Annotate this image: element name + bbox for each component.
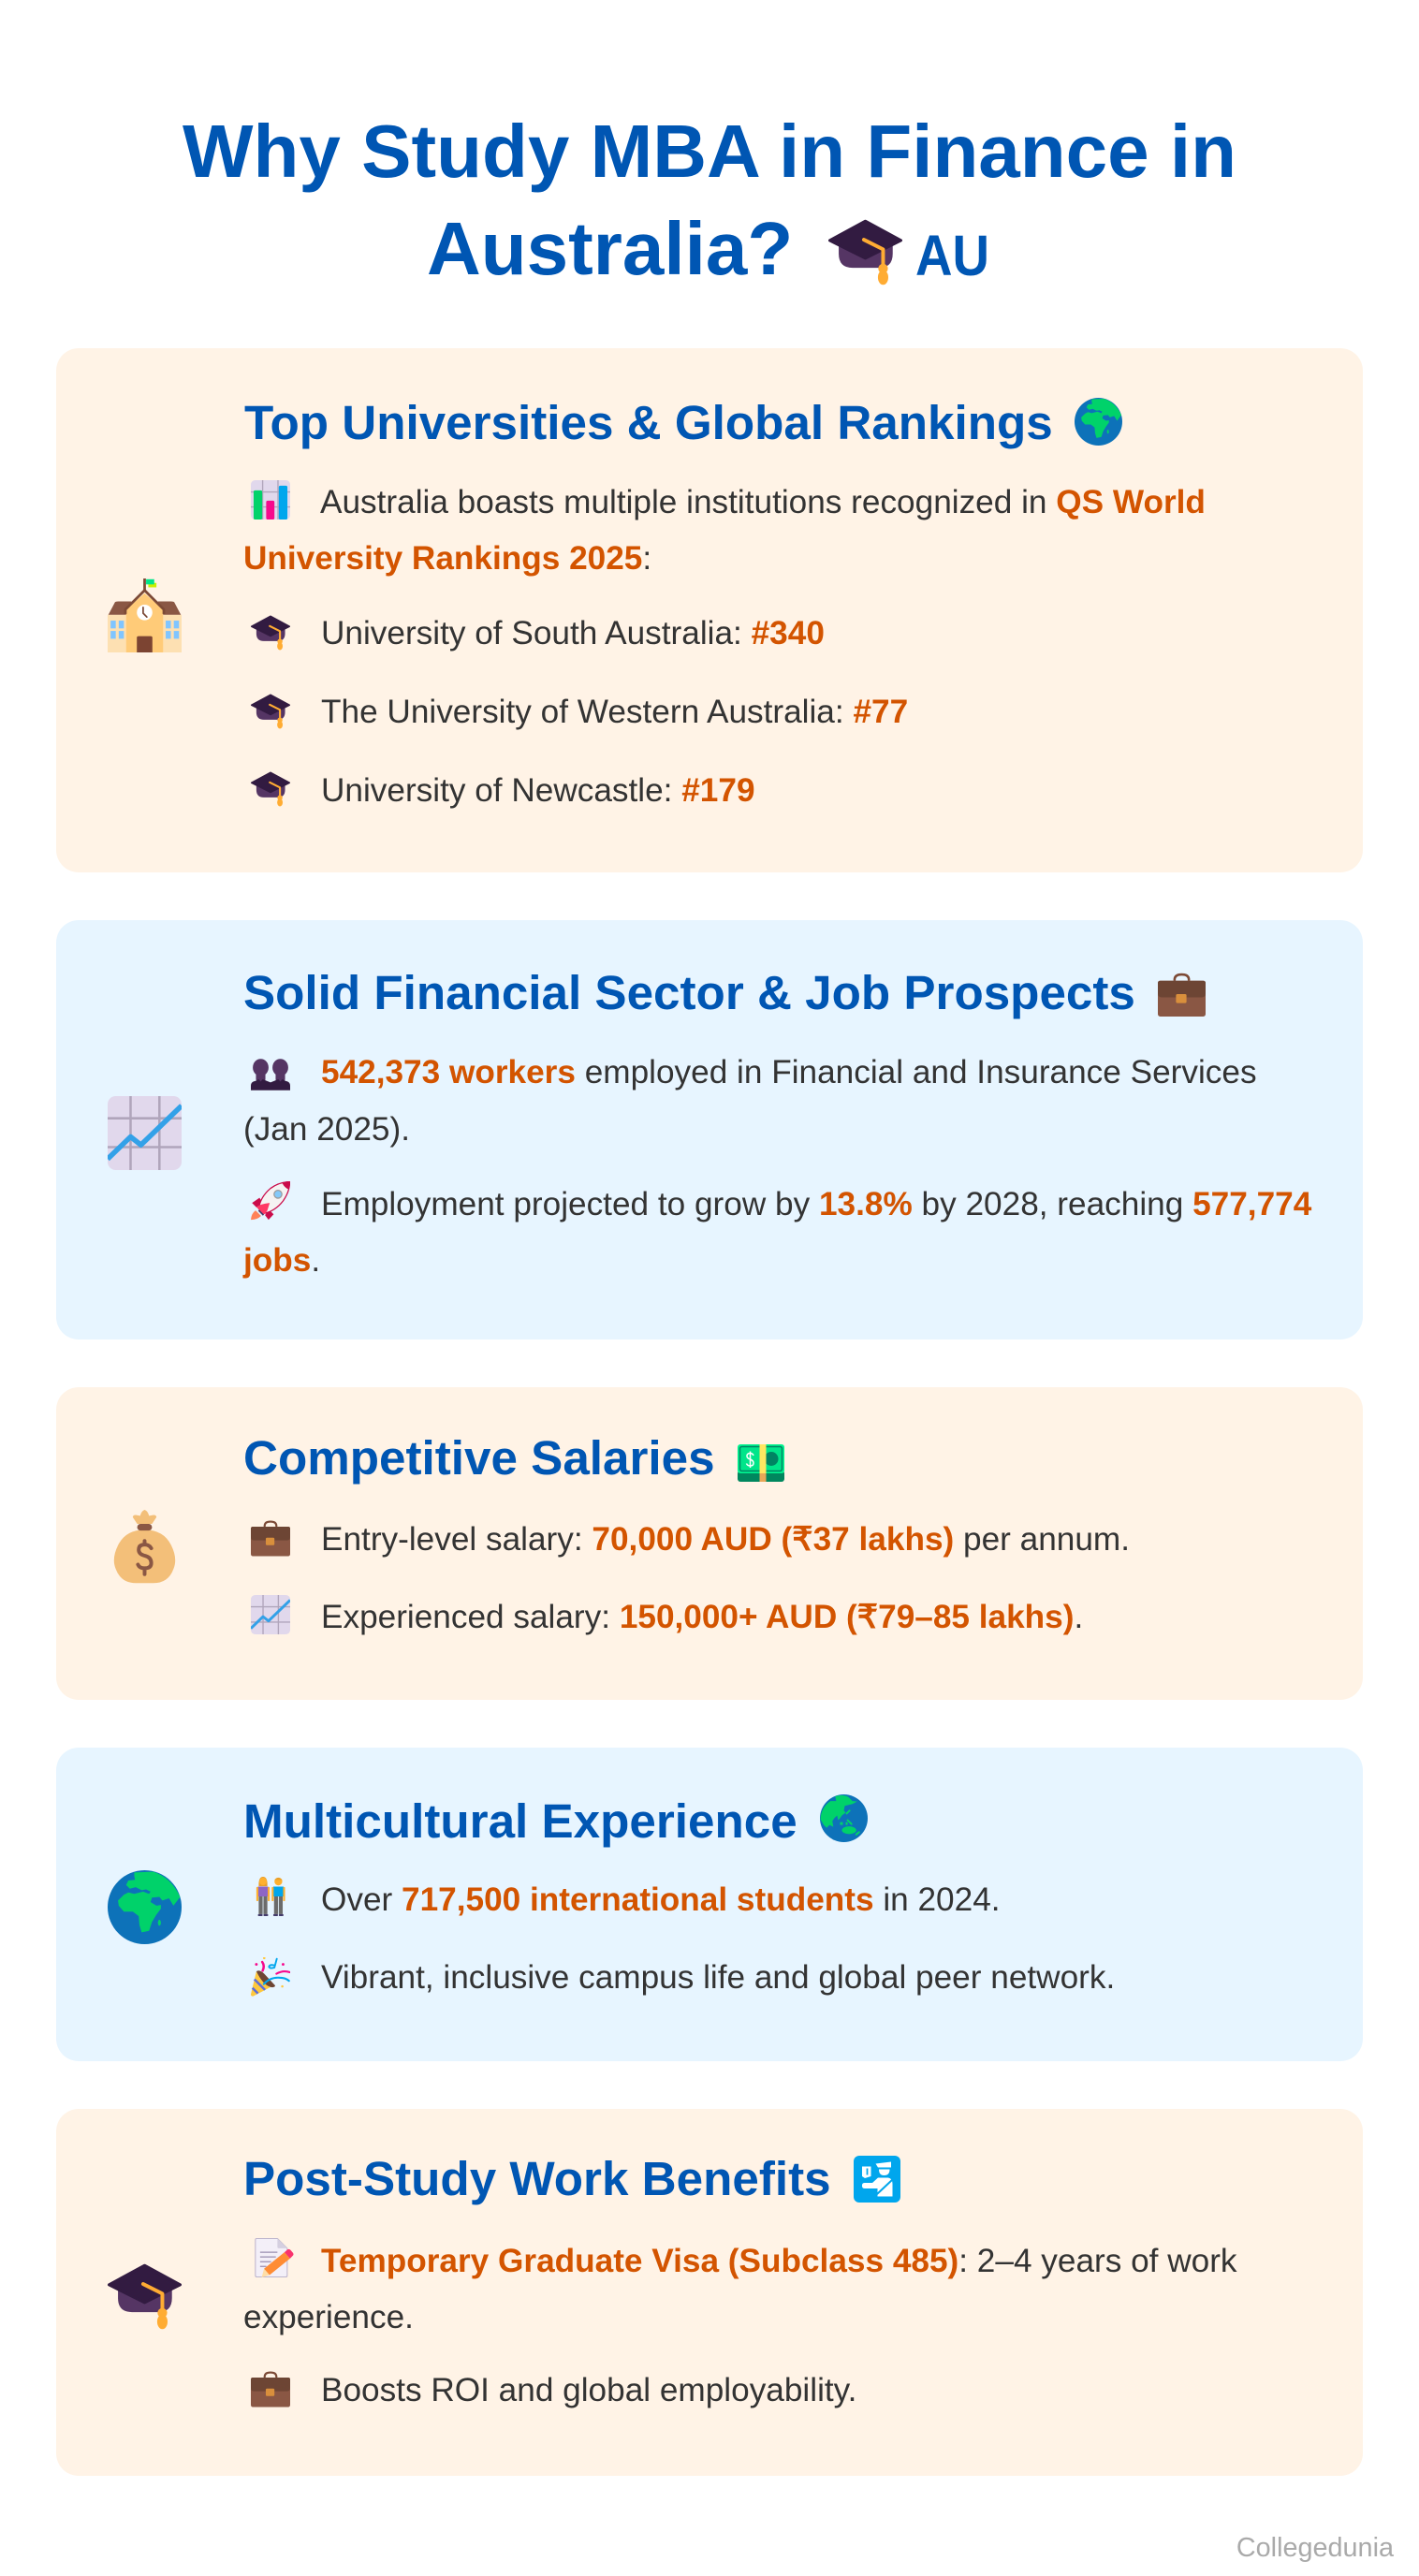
text: workers employed bbox=[243, 1054, 1257, 1148]
title: AU bbox=[915, 224, 989, 287]
panel: solid financial sector and job prospects bbox=[56, 920, 1363, 1339]
text: ROI: Boosts ROI and global employability. bbox=[321, 2372, 856, 2408]
text: campus life: Vibrant, inclusive campus life and global peer network. bbox=[321, 1959, 1115, 1996]
icon: briefcase bbox=[251, 1522, 290, 1556]
heading: salaries: Competitive Salaries bbox=[243, 1431, 715, 1485]
title: Australia? bbox=[427, 207, 793, 290]
icon: school building bbox=[108, 578, 182, 652]
text: entry-level salary: Entry-level salary: 70,000 AUD (₹37 lakhs) per annum. bbox=[321, 1521, 1130, 1558]
text: employment growth bbox=[242, 1186, 1312, 1279]
icon: growth chart small bbox=[251, 1595, 290, 1634]
icon: graduation cap bbox=[252, 772, 289, 806]
text: QS rankings intro: University Rankings 2025: bbox=[243, 540, 651, 577]
text: experienced salary: Experienced salary: 150,000+ AUD (₹79–85 lakhs). bbox=[321, 1599, 1083, 1635]
text: employment growth: jobs. bbox=[242, 1242, 320, 1279]
icon: graduation cap large bbox=[110, 2265, 180, 2329]
icon: party popper bbox=[251, 1957, 290, 1997]
icon: people silhouettes bbox=[251, 1059, 290, 1090]
icon: briefcase bbox=[251, 2373, 290, 2407]
text: workers employed: (Jan 2025). bbox=[243, 1111, 410, 1148]
icon: graduation cap bbox=[252, 695, 289, 728]
icon: briefcase bbox=[1158, 974, 1206, 1017]
text: workers employed: 542,373 workers employed in Financial and Insurance Services bbox=[321, 1054, 1257, 1090]
icon: bar chart bbox=[251, 480, 290, 520]
ranking: University of South Australia: University of South Australia: #340 bbox=[321, 615, 825, 651]
icon: passport control bbox=[854, 2156, 900, 2203]
ranking: University of Newcastle: University of Newcastle: #179 bbox=[321, 772, 755, 809]
icon: couple holding hands bbox=[256, 1877, 285, 1916]
text: graduate visa bbox=[243, 2243, 1237, 2335]
text: employment growth: Employment projected to grow by 13.8% by 2028, reaching 577,774 bbox=[321, 1186, 1312, 1222]
icon: globe asia bbox=[820, 1794, 868, 1842]
heading: top universities: Top Universities & Global Rankings bbox=[244, 396, 1053, 449]
icon: growth chart bbox=[108, 1096, 182, 1170]
panel: top universities and global rankings bbox=[56, 348, 1363, 872]
text: graduate visa: experience. bbox=[243, 2299, 414, 2335]
icon: banknotes bbox=[738, 1444, 784, 1482]
text: QS rankings intro bbox=[243, 484, 1206, 577]
icon: rocket bbox=[251, 1181, 290, 1220]
title bbox=[183, 110, 1236, 290]
icon: globe bbox=[1075, 398, 1122, 446]
panel: competitive salaries bbox=[56, 1387, 1363, 1700]
text: graduate visa: Temporary Graduate Visa (Subclass 485): 2–4 years of work bbox=[321, 2243, 1237, 2279]
icon: money bag bbox=[114, 1510, 175, 1583]
icon: graduation cap bbox=[252, 616, 289, 650]
heading: post-study work: Post-Study Work Benefits bbox=[243, 2152, 831, 2205]
panel: multicultural experience bbox=[56, 1748, 1363, 2061]
ranking: University of Western Australia: The University of Western Australia: #77 bbox=[321, 694, 908, 730]
heading: multicultural: Multicultural Experience bbox=[243, 1794, 797, 1848]
footer watermark: Collegedunia bbox=[1236, 2533, 1395, 2563]
heading: financial sector: Solid Financial Sector & Job Prospects bbox=[243, 966, 1135, 1019]
text: international students: Over 717,500 international students in 2024. bbox=[321, 1881, 1001, 1918]
text: QS rankings intro: Australia boasts multiple institutions recognized in QS World bbox=[320, 484, 1206, 520]
icon: memo bbox=[256, 2238, 293, 2277]
panel: post-study work benefits bbox=[56, 2109, 1363, 2476]
title: Why Study MBA in Finance in bbox=[183, 110, 1236, 193]
icon: globe large bbox=[108, 1870, 182, 1944]
